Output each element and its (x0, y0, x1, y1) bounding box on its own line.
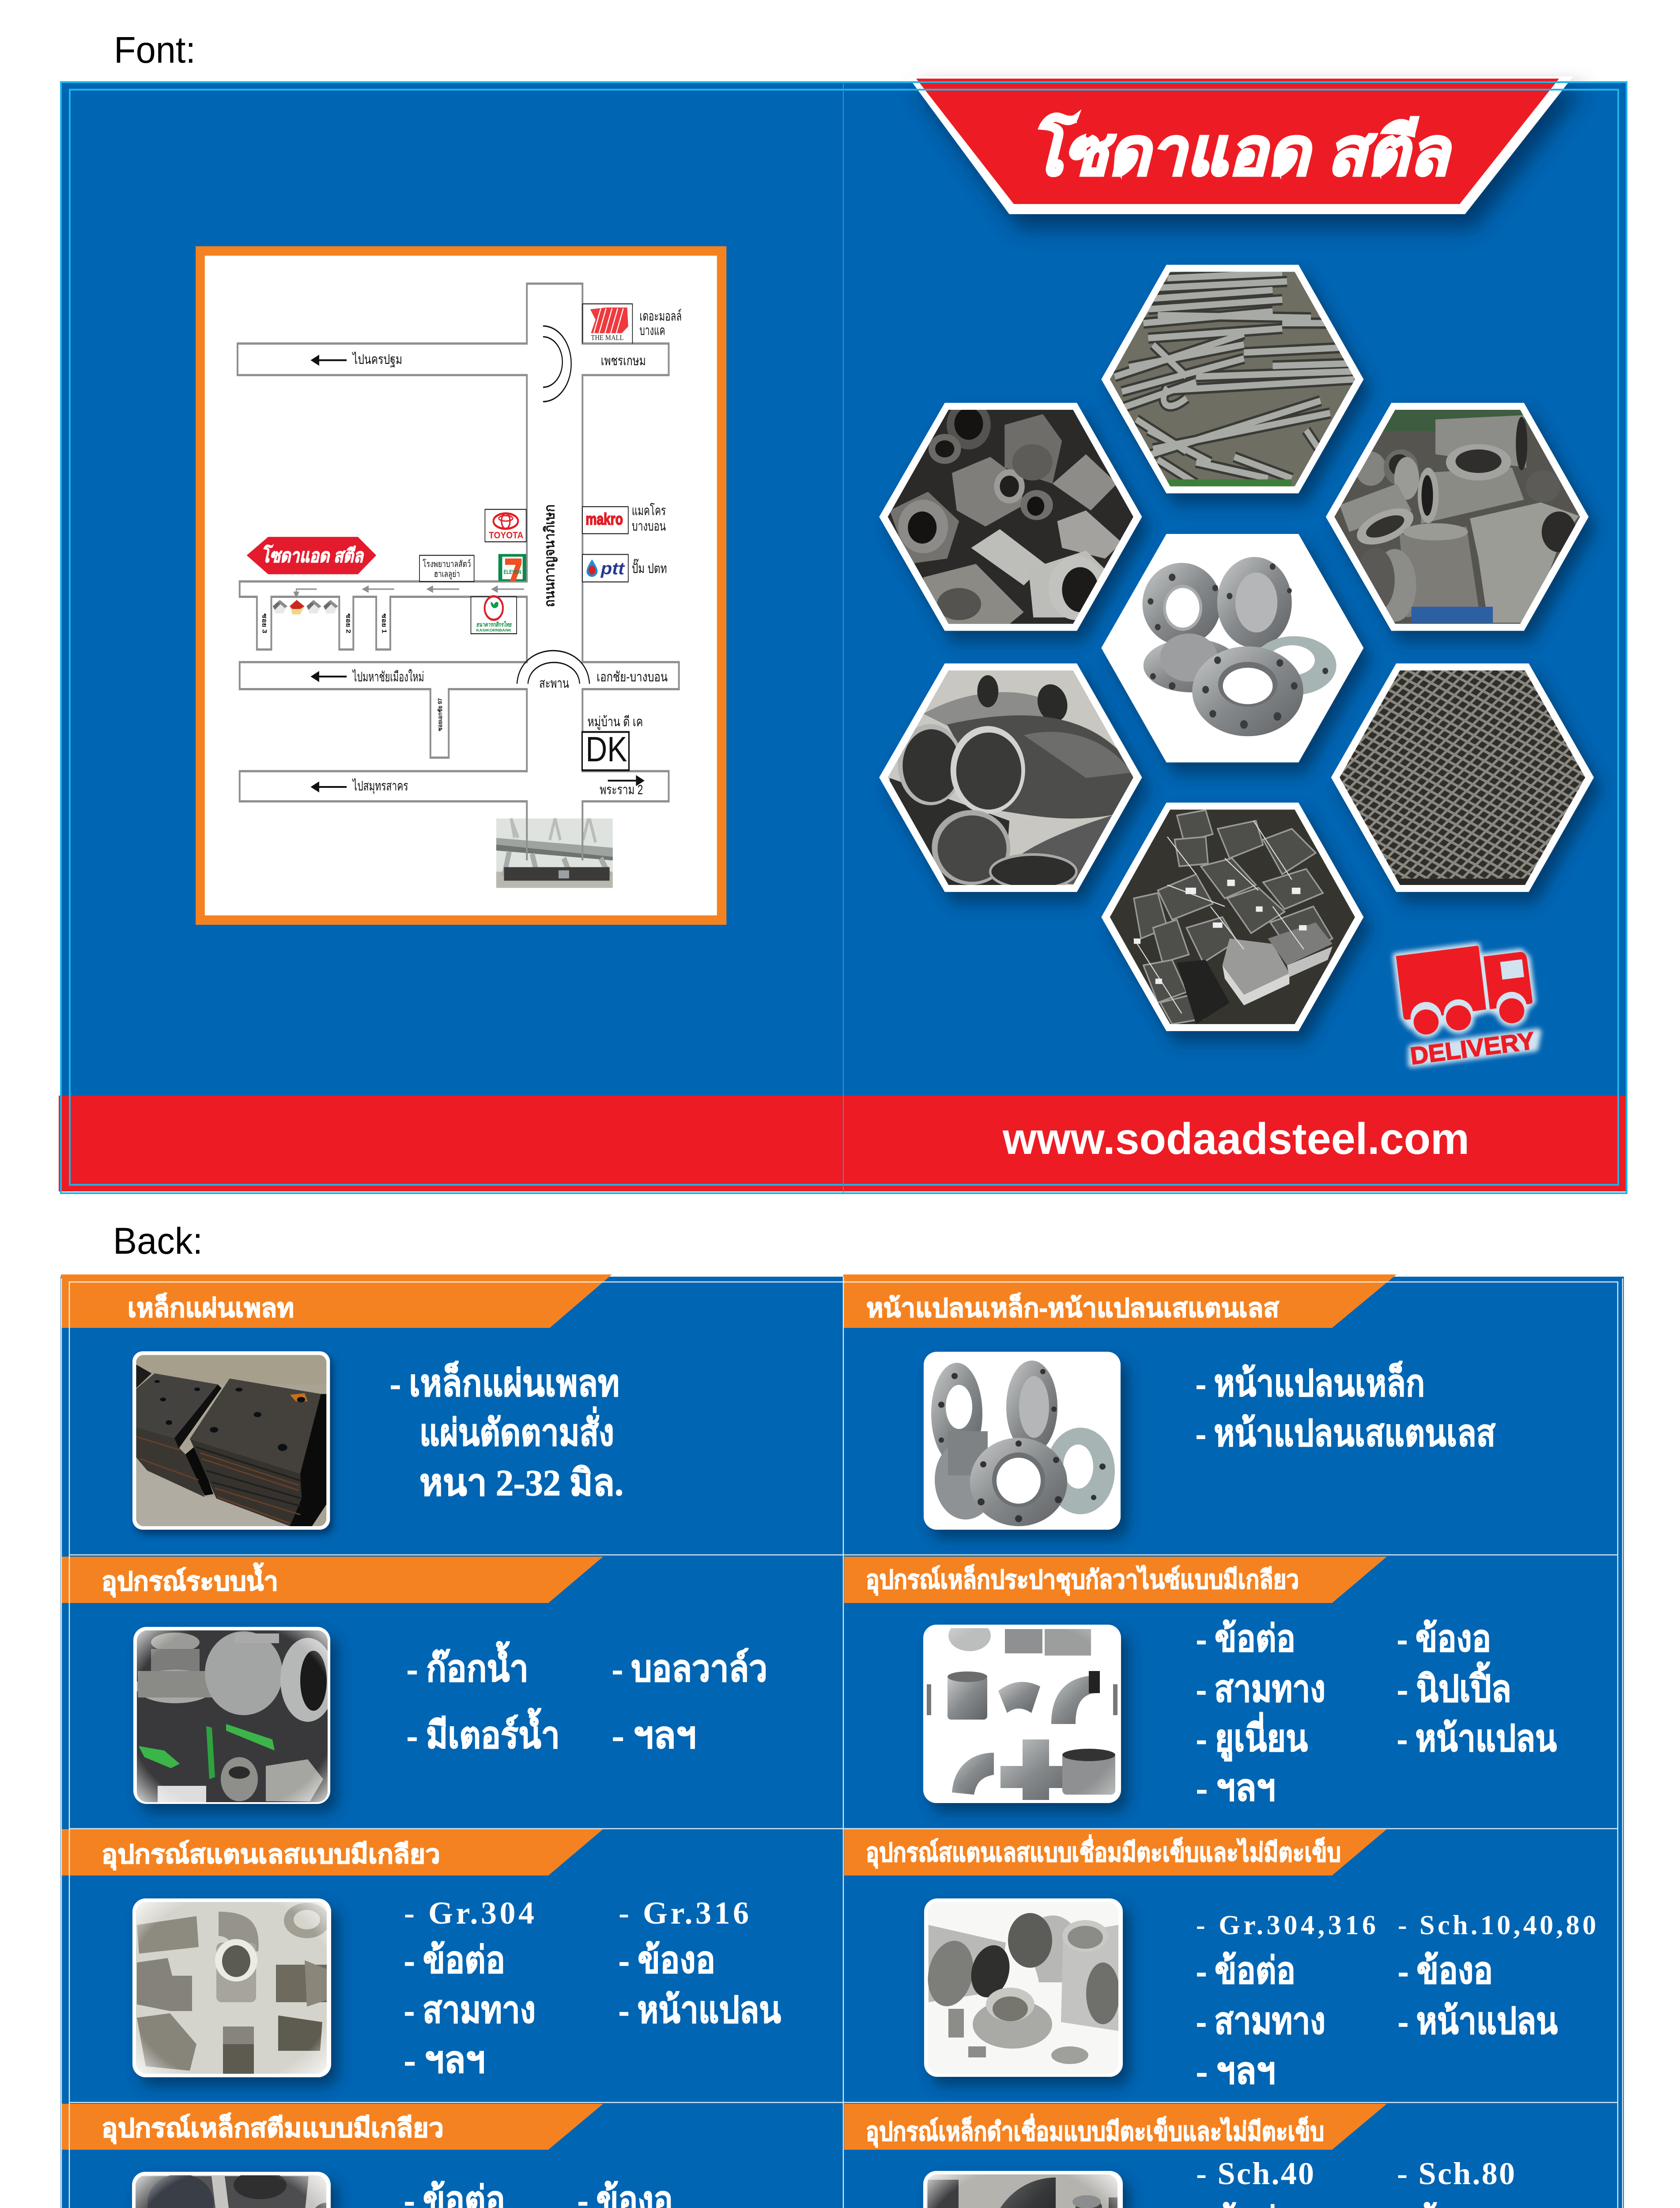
map: road labels: ไปมหาชัยเมืองใหม่ (352, 669, 424, 684)
map: Toyota logo (485, 509, 526, 542)
text: plate steel list (390, 1361, 623, 1504)
footer band (59, 1096, 1626, 1191)
text: galvanized fitting list: - ฯลฯ (1196, 1768, 1276, 1809)
text: stainless welded list: - ข้อต่อ (1196, 1951, 1295, 1992)
map: Kasikornbank logo: ธนาคารกสิกรไทย (476, 620, 512, 628)
map: road labels: ถนนกาญจนาภิเษก (542, 504, 558, 607)
map: road labels: ซอย 3 (261, 613, 268, 633)
map: animal hospital sign (419, 556, 474, 582)
section banner: stainless welded: อุปกรณ์สแตนเลสแบบเชื่อมมีตะเข็บและไม่มีตะเข็บ (866, 1834, 1341, 1869)
photo: stainless threaded fittings (132, 1898, 331, 2077)
hexagon: union fittings (876, 400, 1144, 634)
text: stainless threaded list: - ข้อต่อ (404, 1940, 505, 1981)
map: road labels: เดอะมอลล์ (639, 308, 682, 324)
map: road labels: ซอยเอกชัย 97 (438, 698, 444, 731)
map: road labels: ไปนครปฐม (352, 352, 402, 367)
text: galvanized fitting list (1196, 1618, 1557, 1809)
map: road labels: ซอย 2 (345, 613, 352, 633)
hexagon: stainless flanges (1101, 534, 1363, 763)
map: road labels: หมู่บ้าน ดี เค (587, 714, 643, 730)
text: water system list: - บอลวาล์ว (612, 1648, 767, 1690)
text: steam fitting list (404, 2180, 673, 2208)
map: toll plaza photo (496, 818, 613, 888)
section banner: steam threaded (61, 2104, 603, 2150)
title banner (908, 76, 1573, 214)
text: water system list: - ฯลฯ (612, 1715, 696, 1756)
section banner: plate steel (61, 1274, 612, 1328)
map: road labels: เพชรเกษม (601, 353, 646, 368)
text: plate steel list: - เหล็กแผ่นเพลท (390, 1361, 619, 1404)
heading: Back: Back: (113, 1220, 203, 1262)
website URL: www.sodaadsteel.com (1002, 1114, 1469, 1164)
text: flange list: - หน้าแปลนเหล็ก (1196, 1361, 1425, 1404)
text: stainless threaded list (404, 1895, 781, 2081)
photo: galvanized fittings (923, 1620, 1121, 1803)
map: road labels: พระราม 2 (600, 782, 643, 797)
map: DK village sign: DK (585, 730, 627, 769)
map: road labels: เอกชัย-บางบอน (596, 669, 668, 684)
panel: back cover (60, 1274, 1624, 2208)
map: Toyota logo: TOYOTA (489, 530, 523, 541)
text: black steel list (1196, 2156, 1557, 2208)
photo: water valves (133, 1627, 335, 1806)
text: stainless welded list: - หน้าแปลน (1398, 2001, 1558, 2042)
map: road labels: ไปสมุทรสาคร (352, 778, 408, 794)
text: water system list: - มีเตอร์น้ำ (407, 1708, 560, 1756)
map: interchange arcs (517, 326, 589, 684)
text: galvanized fitting list: - ยูเนี่ยน (1196, 1712, 1308, 1762)
text: stainless threaded list: - ข้องอ (619, 1940, 715, 1981)
hexagon: stacked steel plates (1100, 802, 1368, 1035)
back trim lines (61, 1277, 1623, 2208)
icon: delivery truck with label (1396, 946, 1538, 1070)
text: stainless welded list: - ข้องอ (1398, 1951, 1493, 1992)
map: direction arrows (312, 356, 643, 791)
text: stainless threaded list: - Gr.316 (619, 1895, 749, 1931)
heading: Font: Font: (114, 29, 196, 71)
section banner: black welded: อุปกรณ์เหล็กดำเชื่อมแบบมีตะเข็บและไม่มีตะเข็บ (866, 2113, 1324, 2148)
map: road labels: บางบอน (632, 518, 666, 533)
text: black steel list: - Sch.80 (1397, 2156, 1515, 2191)
panel: front cover (59, 76, 1627, 1193)
section banner: stainless welded (844, 1829, 1387, 1875)
text: galvanized fitting list: - ข้องอ (1397, 1618, 1491, 1660)
map: road labels: ซอย 1 (381, 613, 388, 633)
hexagon: black steel elbows (876, 663, 1144, 896)
front trim lines (61, 82, 1627, 1193)
map: Makro logo (582, 507, 628, 534)
map: Kasikornbank logo (471, 596, 517, 634)
map: Makro logo: makro (585, 510, 623, 528)
text: stainless threaded list: - สามทาง (404, 1990, 536, 2031)
map: road network (238, 284, 679, 860)
text: galvanized fitting list: - สามทาง (1196, 1669, 1325, 1710)
map: Kasikornbank logo: KASIKORNBANK (476, 628, 512, 632)
map: 7-Eleven logo: ELEVEN (504, 568, 521, 575)
section banner: flanges (843, 1274, 1397, 1328)
section banner: stainless threaded (61, 1829, 603, 1875)
map: animal hospital sign: โรงพยาบาลสัตว์ (423, 559, 471, 569)
map: The Mall logo: THE MALL (591, 334, 624, 342)
section banner: black welded (844, 2104, 1387, 2150)
text: stainless welded list: - สามทาง (1196, 2001, 1325, 2042)
text: galvanized fitting list: - หน้าแปลน (1397, 1718, 1557, 1759)
title text: โซดาแอด สตีล (1029, 113, 1452, 189)
icon: delivery truck with label: DELIVERY (1408, 1027, 1536, 1070)
section banner: galvanized threaded (844, 1557, 1387, 1603)
section banner: water system: อุปกรณ์ระบบน้ำ (102, 1563, 278, 1598)
section banner: water system (61, 1557, 603, 1603)
map: road labels: ปั๊ม ปตท (632, 558, 667, 576)
hexagon: steel turnbuckles (1100, 264, 1368, 494)
photo: black steel welded fittings (914, 2171, 1123, 2208)
map: small soi arrows (294, 586, 524, 597)
text: stainless threaded list: - ฯลฯ (404, 2040, 485, 2081)
map: road labels: แมคโคร (632, 503, 666, 518)
hexagon: expanded metal mesh (1330, 663, 1598, 896)
map: company location sign (247, 537, 376, 574)
text: stainless threaded list: - Gr.304 (404, 1895, 534, 1931)
map: company location sign: โซดาแอด สตีล (261, 544, 364, 567)
text: stainless threaded list: - หน้าแปลน (619, 1990, 781, 2031)
map: PTT logo: ptt (600, 560, 625, 578)
photo: flanges (924, 1352, 1121, 1530)
text: stainless welded list: - Sch.10,40,80 (1398, 1910, 1596, 1940)
text: stainless welded list: - Gr.304,316 (1196, 1910, 1376, 1940)
map: row of houses (273, 600, 338, 614)
text: water system list: - ก๊อกน้ำ (407, 1641, 529, 1690)
text: stainless welded list: - ฯลฯ (1196, 2051, 1276, 2092)
hexagon: galvanized tee fittings (1325, 403, 1593, 634)
photo: plate steel (132, 1351, 330, 1530)
text: black steel list: - Sch.40 (1196, 2156, 1314, 2191)
map: 7-Eleven logo (498, 554, 526, 581)
section banner: plate steel: เหล็กแผ่นเพลท (128, 1293, 294, 1323)
photo: stainless welded fittings (922, 1898, 1123, 2077)
section banner: flanges: หน้าแปลนเหล็ก-หน้าแปลนเสแตนเลส (866, 1293, 1280, 1323)
text: stainless welded list (1196, 1910, 1596, 2092)
map: PTT logo (582, 555, 628, 582)
text: plate steel list: หนา 2-32 มิล. (419, 1463, 623, 1504)
map: road labels (261, 308, 682, 797)
section banner: steam threaded: อุปกรณ์เหล็กสตีมแบบมีเกลียว (102, 2113, 444, 2144)
section banner: galvanized threaded: อุปกรณ์เหล็กประปาชุบกัลวาไนซ์แบบมีเกลียว (866, 1564, 1299, 1596)
photo: steam fittings (120, 2171, 344, 2208)
hexagon photo grid (876, 264, 1598, 1035)
text: flange list: - หน้าแปลนเสแตนเลส (1196, 1413, 1496, 1454)
map: The Mall logo (582, 304, 632, 344)
location map (196, 246, 726, 925)
text: water system list (407, 1641, 767, 1756)
map: road labels: สะพาน (539, 676, 569, 691)
text: plate steel list: แผ่นตัดตามสั่ง (419, 1406, 614, 1454)
section banner: stainless threaded: อุปกรณ์สแตนเลสแบบมีเกลียว (102, 1840, 440, 1871)
map: animal hospital sign: ฮาเลลูย่า (434, 569, 460, 579)
text: galvanized fitting list: - นิปเปิ้ล (1397, 1661, 1511, 1710)
text: galvanized fitting list: - ข้อต่อ (1196, 1618, 1295, 1660)
text: flange list (1196, 1361, 1496, 1454)
map: road labels: บางแค (639, 323, 665, 338)
